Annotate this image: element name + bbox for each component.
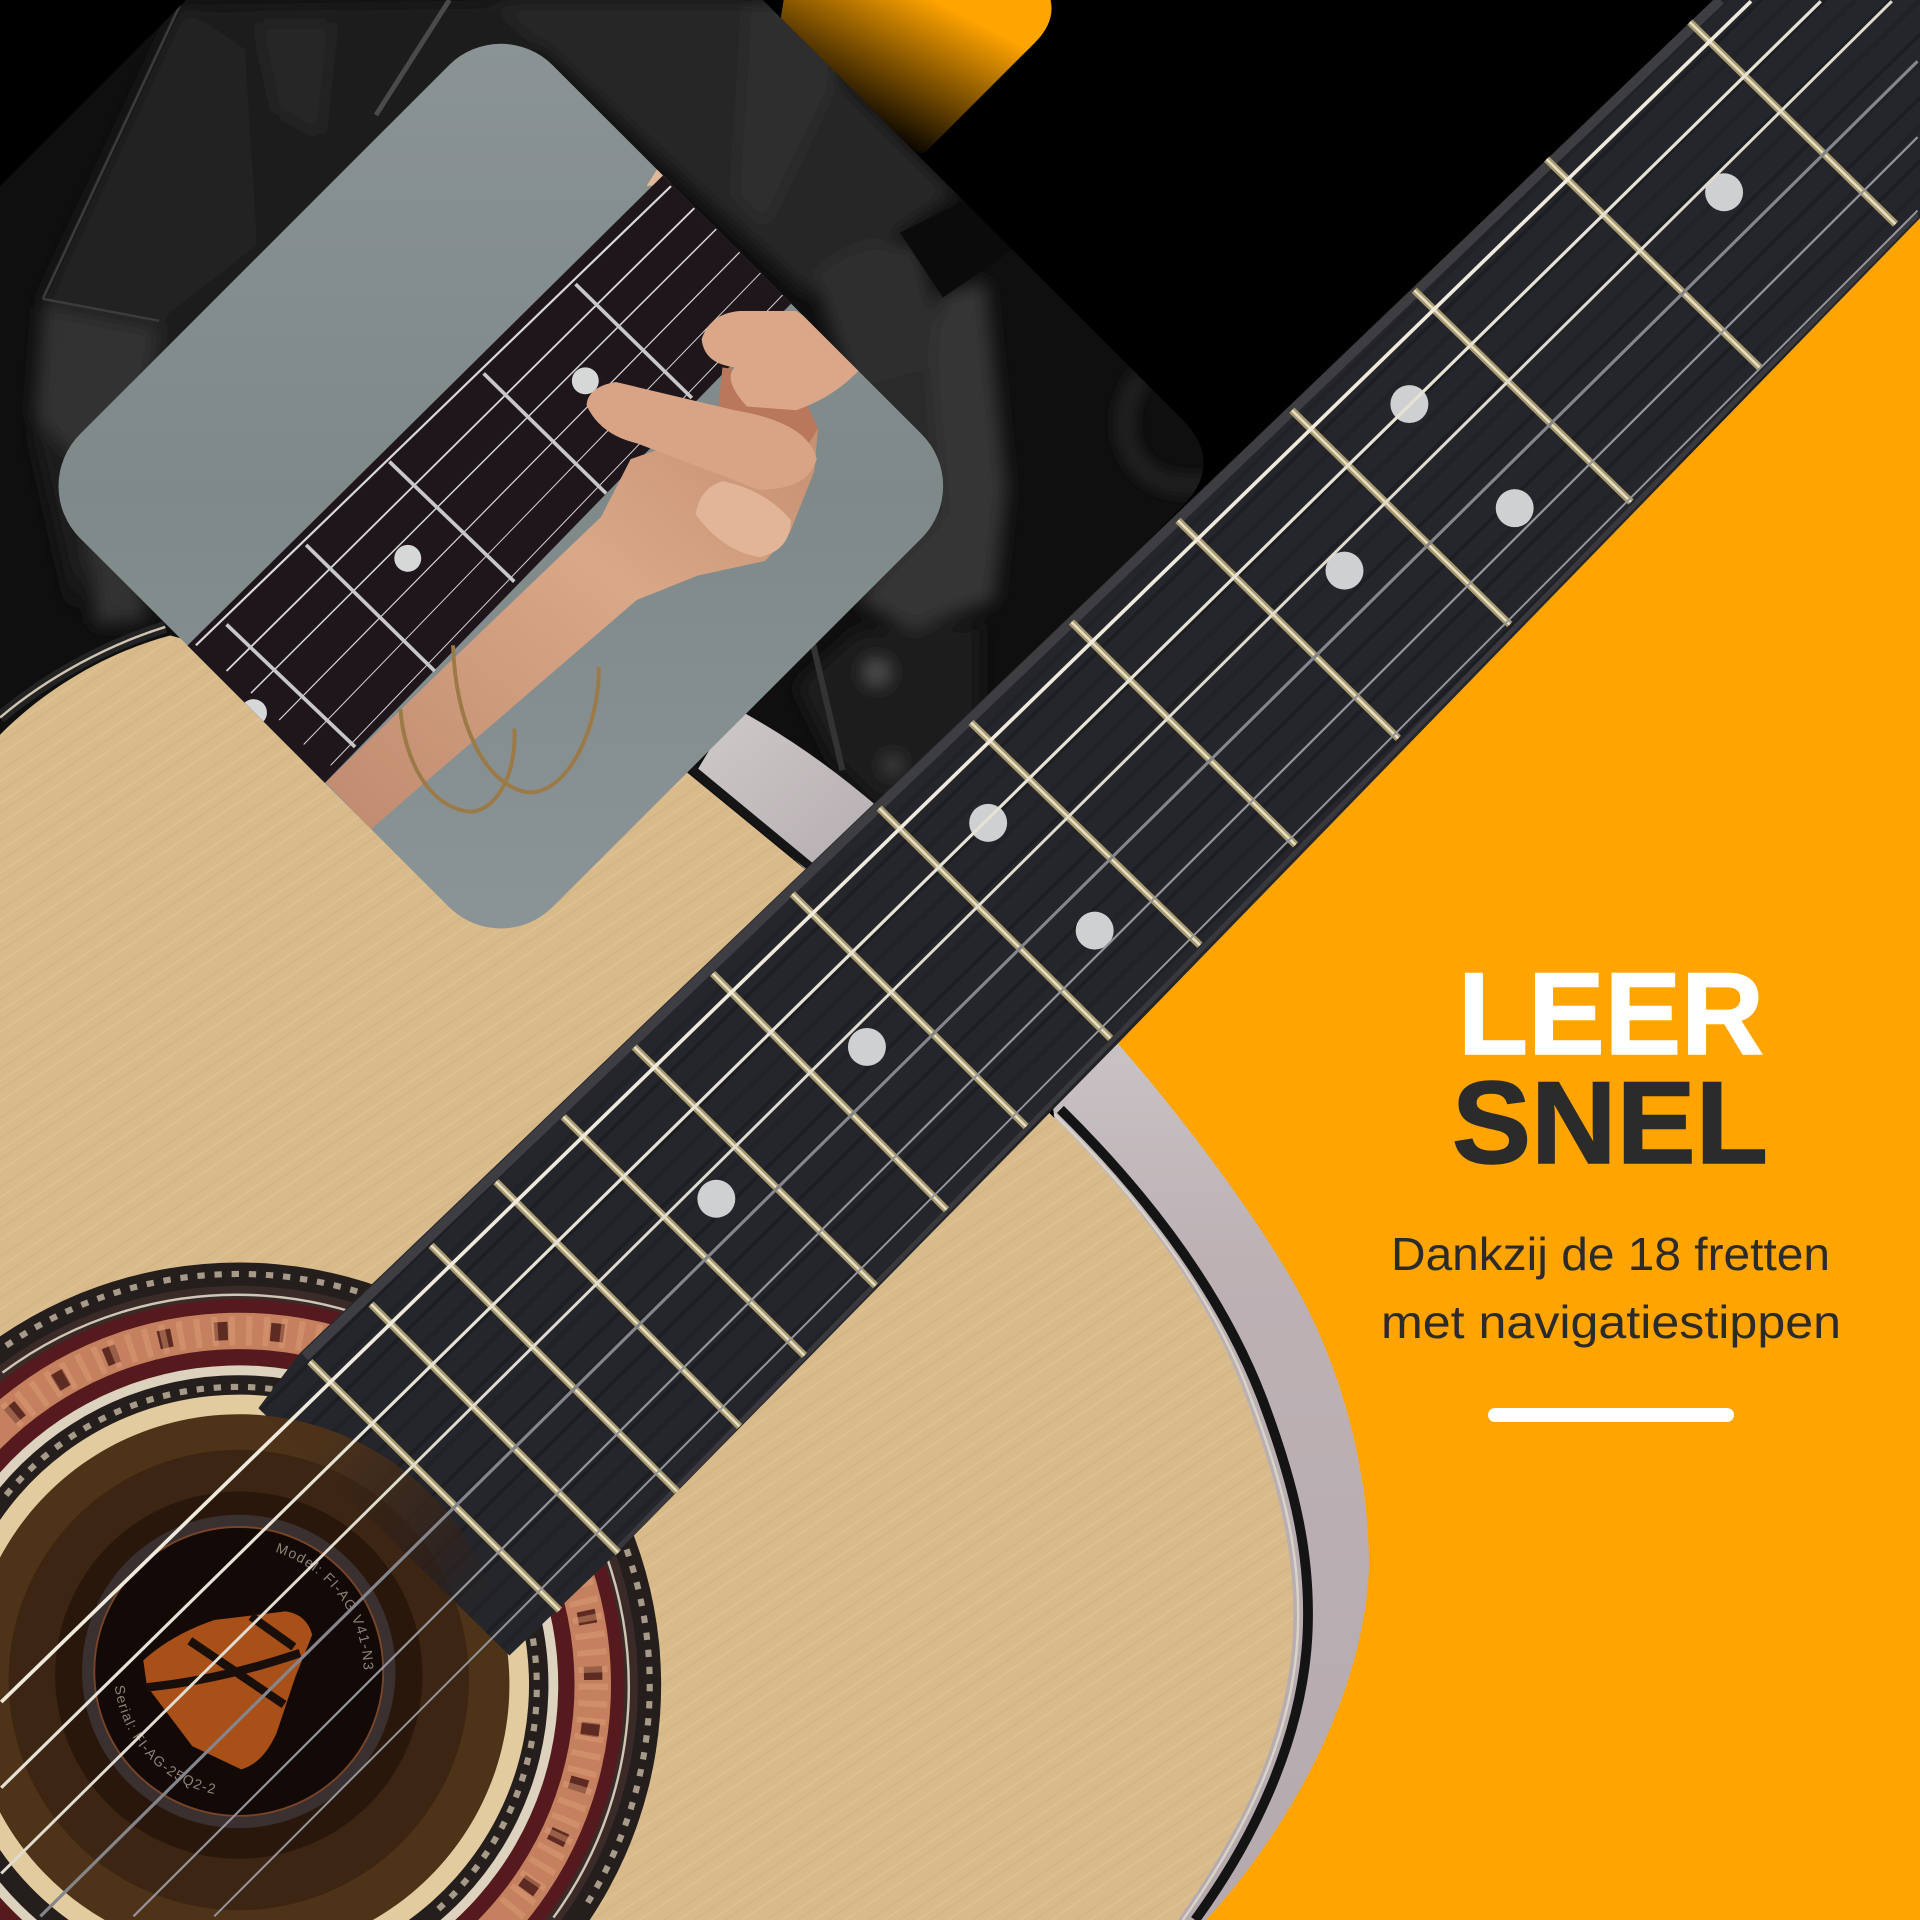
logo pick xyxy=(143,1611,312,1769)
inlay dots xyxy=(697,173,1743,1218)
photo card with hand on fretboard xyxy=(0,0,1004,980)
orange gradient corner shape xyxy=(759,0,1052,153)
small inlay dots xyxy=(240,367,599,726)
label inside sound hole xyxy=(94,1527,383,1816)
photographed guitar neck xyxy=(900,200,1013,298)
guitar side rim xyxy=(698,708,1369,1920)
skin detail behind fretboard xyxy=(647,167,671,186)
guitar body wood top xyxy=(0,636,1293,1920)
body binding xyxy=(0,627,1308,1920)
sound hole xyxy=(0,1414,509,1920)
shirt fold lines xyxy=(43,0,842,770)
label text: Model: FI-AG V41-N3 xyxy=(276,1543,374,1670)
heading: SNEL: SNEL xyxy=(1452,1057,1768,1188)
orange panel xyxy=(1108,218,1920,1920)
hand and arm xyxy=(326,311,860,829)
sound hole showing through neck end xyxy=(0,1414,509,1920)
fret highlights xyxy=(310,22,1896,1610)
small strings xyxy=(196,186,784,765)
white divider bar xyxy=(1488,1408,1734,1422)
description line 2: met navigatiestippen xyxy=(1381,1296,1841,1348)
frets xyxy=(310,22,1896,1610)
heading: LEER: LEER xyxy=(1458,948,1764,1079)
bracelets xyxy=(400,645,599,812)
description line 1: Dankzij de 18 fretten xyxy=(1391,1228,1830,1280)
dark photo of guitarist xyxy=(0,0,1204,869)
small fretboard xyxy=(159,147,833,796)
small frets xyxy=(227,284,692,747)
rosette xyxy=(0,1263,661,1920)
text block xyxy=(1381,948,1841,1422)
label inside sound hole: Serial: FI-AG-25Q2-2 xyxy=(115,1686,216,1794)
